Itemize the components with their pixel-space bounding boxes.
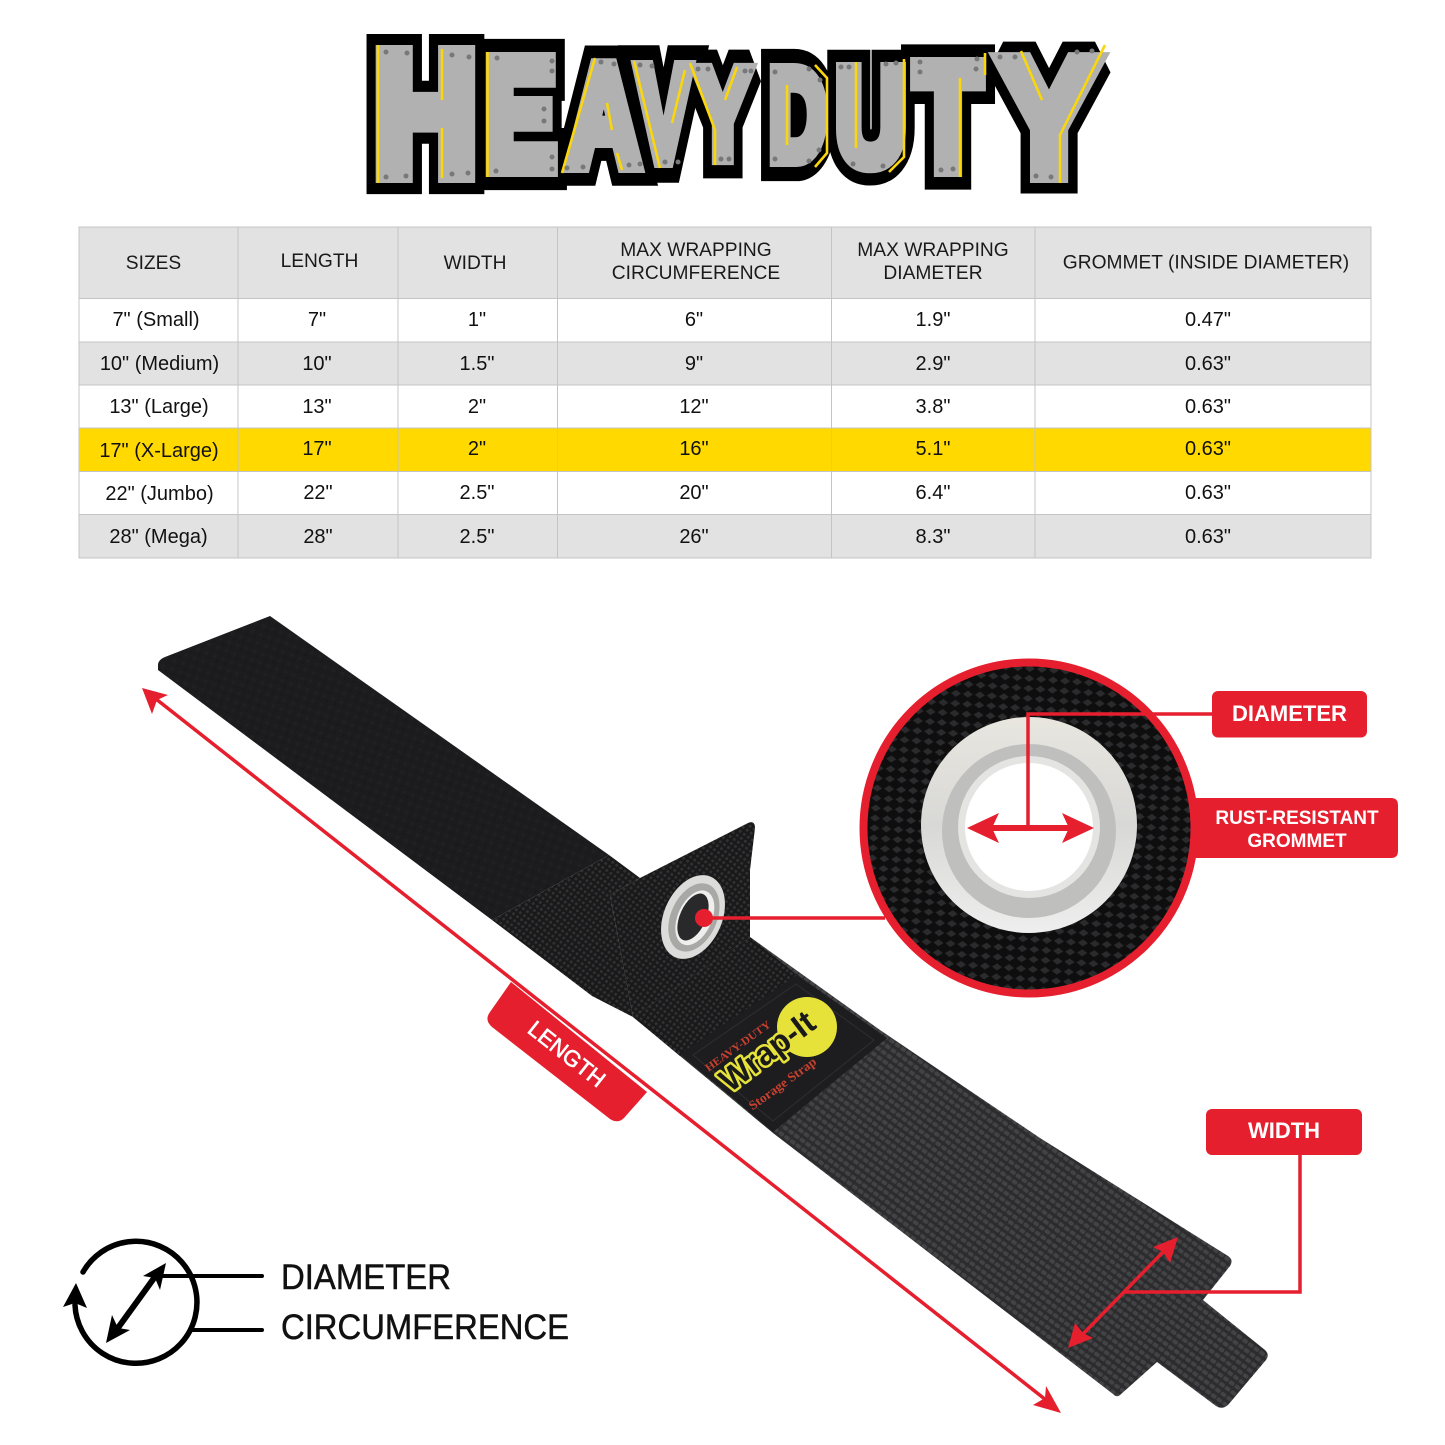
row: 28 inch mega: 28" xyxy=(303,526,333,548)
row: 17 inch x-large highlighted: 0.63" xyxy=(1185,438,1231,460)
row: 28 inch mega: 0.63" xyxy=(1185,526,1231,548)
diameter label xyxy=(1212,691,1367,738)
row: 7 inch small: 0.47" xyxy=(1185,309,1231,331)
row: 13 inch large: 13" (Large) xyxy=(109,396,209,418)
logo: HEAVY DUTY: U xyxy=(836,42,906,194)
connector from strap grommet to detail circle xyxy=(695,909,885,927)
row: 7 inch small: 1" xyxy=(468,309,486,331)
logo: HEAVY DUTY: E xyxy=(485,29,556,202)
logo: HEAVY DUTY: V xyxy=(637,40,690,189)
woven band below fold xyxy=(633,937,797,1056)
small grommet xyxy=(649,865,737,969)
row: 22 inch jumbo: 22" (Jumbo) xyxy=(105,483,214,505)
width label: WIDTH xyxy=(1248,1118,1320,1143)
row: 13 inch large: 12" xyxy=(679,396,709,418)
logo: HEAVY DUTY: A xyxy=(568,36,639,195)
row: 13 inch large xyxy=(79,385,1371,428)
row: 28 inch mega xyxy=(79,514,1371,558)
row: 7 inch small: 7" xyxy=(308,309,326,331)
logo: HEAVY DUTY: U xyxy=(836,42,906,194)
width arrow and leader xyxy=(1068,1155,1300,1348)
diameter label: DIAMETER xyxy=(1232,701,1347,726)
row: 28 inch mega: 28" (Mega) xyxy=(109,526,208,548)
row: 10 inch medium: 10" (Medium) xyxy=(100,353,219,375)
row: 28 inch mega: 2.5" xyxy=(460,526,494,548)
table header row: MAX WRAPPING xyxy=(857,240,1009,261)
table header row: LENGTH xyxy=(281,251,358,272)
row: 10 inch medium: 2.9" xyxy=(916,353,950,375)
row: 17 inch x-large highlighted: 16" xyxy=(679,438,709,460)
row: 17 inch x-large highlighted xyxy=(79,428,1371,472)
fold tab with grommet xyxy=(610,822,755,1017)
length label xyxy=(487,982,647,1121)
logo: HEAVY DUTY: D xyxy=(769,42,826,187)
velcro end xyxy=(158,616,609,920)
rust-resistant grommet label xyxy=(1192,798,1398,858)
row: 10 inch medium: 1.5" xyxy=(460,353,494,375)
row: 22 inch jumbo: 0.63" xyxy=(1185,482,1231,504)
lower webbing strap with end tab xyxy=(633,937,1268,1408)
legend label: diameter: DIAMETER xyxy=(281,1258,451,1297)
table header row xyxy=(79,227,1371,298)
table header row: SIZES xyxy=(126,253,181,274)
row: 17 inch x-large highlighted: 5.1" xyxy=(916,438,950,460)
woven label: Wrap-It xyxy=(680,975,887,1132)
row: 7 inch small: 6" xyxy=(685,309,703,331)
table header row: DIAMETER xyxy=(883,263,983,284)
table header row: WIDTH xyxy=(444,253,506,274)
row: 13 inch large: 0.63" xyxy=(1185,396,1231,418)
rust-resistant grommet label: GROMMET xyxy=(1247,831,1347,852)
big grommet ring xyxy=(921,717,1137,933)
row: 22 inch jumbo: 22" xyxy=(303,482,333,504)
row: 28 inch mega: 8.3" xyxy=(916,526,950,548)
row: 22 inch jumbo xyxy=(79,472,1371,514)
logo: HEAVY DUTY: Y xyxy=(1001,27,1097,208)
logo: HEAVY DUTY: H xyxy=(375,19,476,210)
row: 13 inch large: 2" xyxy=(468,396,486,418)
legend: diameter and circumference icon xyxy=(63,1241,262,1363)
logo: HEAVY DUTY: A xyxy=(568,36,639,195)
logo: HEAVY DUTY: E xyxy=(485,29,556,202)
row: 17 inch x-large highlighted: 17" xyxy=(302,438,332,460)
woven section by fold xyxy=(492,855,640,1017)
table header row: CIRCUMFERENCE xyxy=(612,263,780,284)
row: 7 inch small: 1.9" xyxy=(916,309,950,331)
inner diameter arrow xyxy=(967,714,1215,843)
logo: HEAVY DUTY: D xyxy=(769,42,826,187)
length dimension arrow xyxy=(142,688,1061,1413)
strap photo xyxy=(158,616,1268,1408)
table header row: MAX WRAPPING xyxy=(620,240,772,261)
row: 28 inch mega: 26" xyxy=(679,526,709,548)
woven label: Wrap-It: Wrap-It xyxy=(712,1003,822,1099)
legend label: circumference: CIRCUMFERENCE xyxy=(281,1308,569,1347)
table header row: GROMMET (INSIDE DIAMETER) xyxy=(1063,252,1349,274)
logo: HEAVY DUTY: Y xyxy=(695,43,751,185)
row: 10 inch medium xyxy=(79,342,1371,385)
size table xyxy=(79,227,1371,558)
grommet detail circle xyxy=(859,658,1199,998)
row: 10 inch medium: 10" xyxy=(302,353,332,375)
rust-resistant grommet label: RUST-RESISTANT xyxy=(1215,808,1379,829)
logo: HEAVY DUTY: T xyxy=(915,35,981,200)
row: 17 inch x-large highlighted: 2" xyxy=(468,438,486,460)
row: 22 inch jumbo: 6.4" xyxy=(916,482,950,504)
row: 22 inch jumbo: 20" xyxy=(679,482,709,504)
logo: HEAVY DUTY: T xyxy=(915,35,981,200)
row: 17 inch x-large highlighted: 17" (X-Large) xyxy=(99,440,219,462)
row: 10 inch medium: 0.63" xyxy=(1185,353,1231,375)
woven label: Wrap-It: Storage Strap xyxy=(746,1054,819,1113)
row: 13 inch large: 13" xyxy=(302,396,332,418)
row: 7 inch small xyxy=(79,298,1371,342)
row: 13 inch large: 3.8" xyxy=(916,396,950,418)
width label xyxy=(1206,1109,1362,1155)
length label: LENGTH xyxy=(523,1016,610,1092)
row: 7 inch small: 7" (Small) xyxy=(112,309,200,331)
logo: HEAVY DUTY: Y xyxy=(695,43,751,185)
row: 22 inch jumbo: 2.5" xyxy=(460,482,494,504)
logo: HEAVY DUTY: H xyxy=(375,19,476,210)
row: 10 inch medium: 9" xyxy=(685,353,703,375)
logo: HEAVY DUTY xyxy=(375,19,1105,210)
logo: HEAVY DUTY: Y xyxy=(1001,27,1097,208)
logo: HEAVY DUTY: V xyxy=(637,40,690,189)
woven label: Wrap-It: HEAVY-DUTY xyxy=(703,1019,773,1074)
